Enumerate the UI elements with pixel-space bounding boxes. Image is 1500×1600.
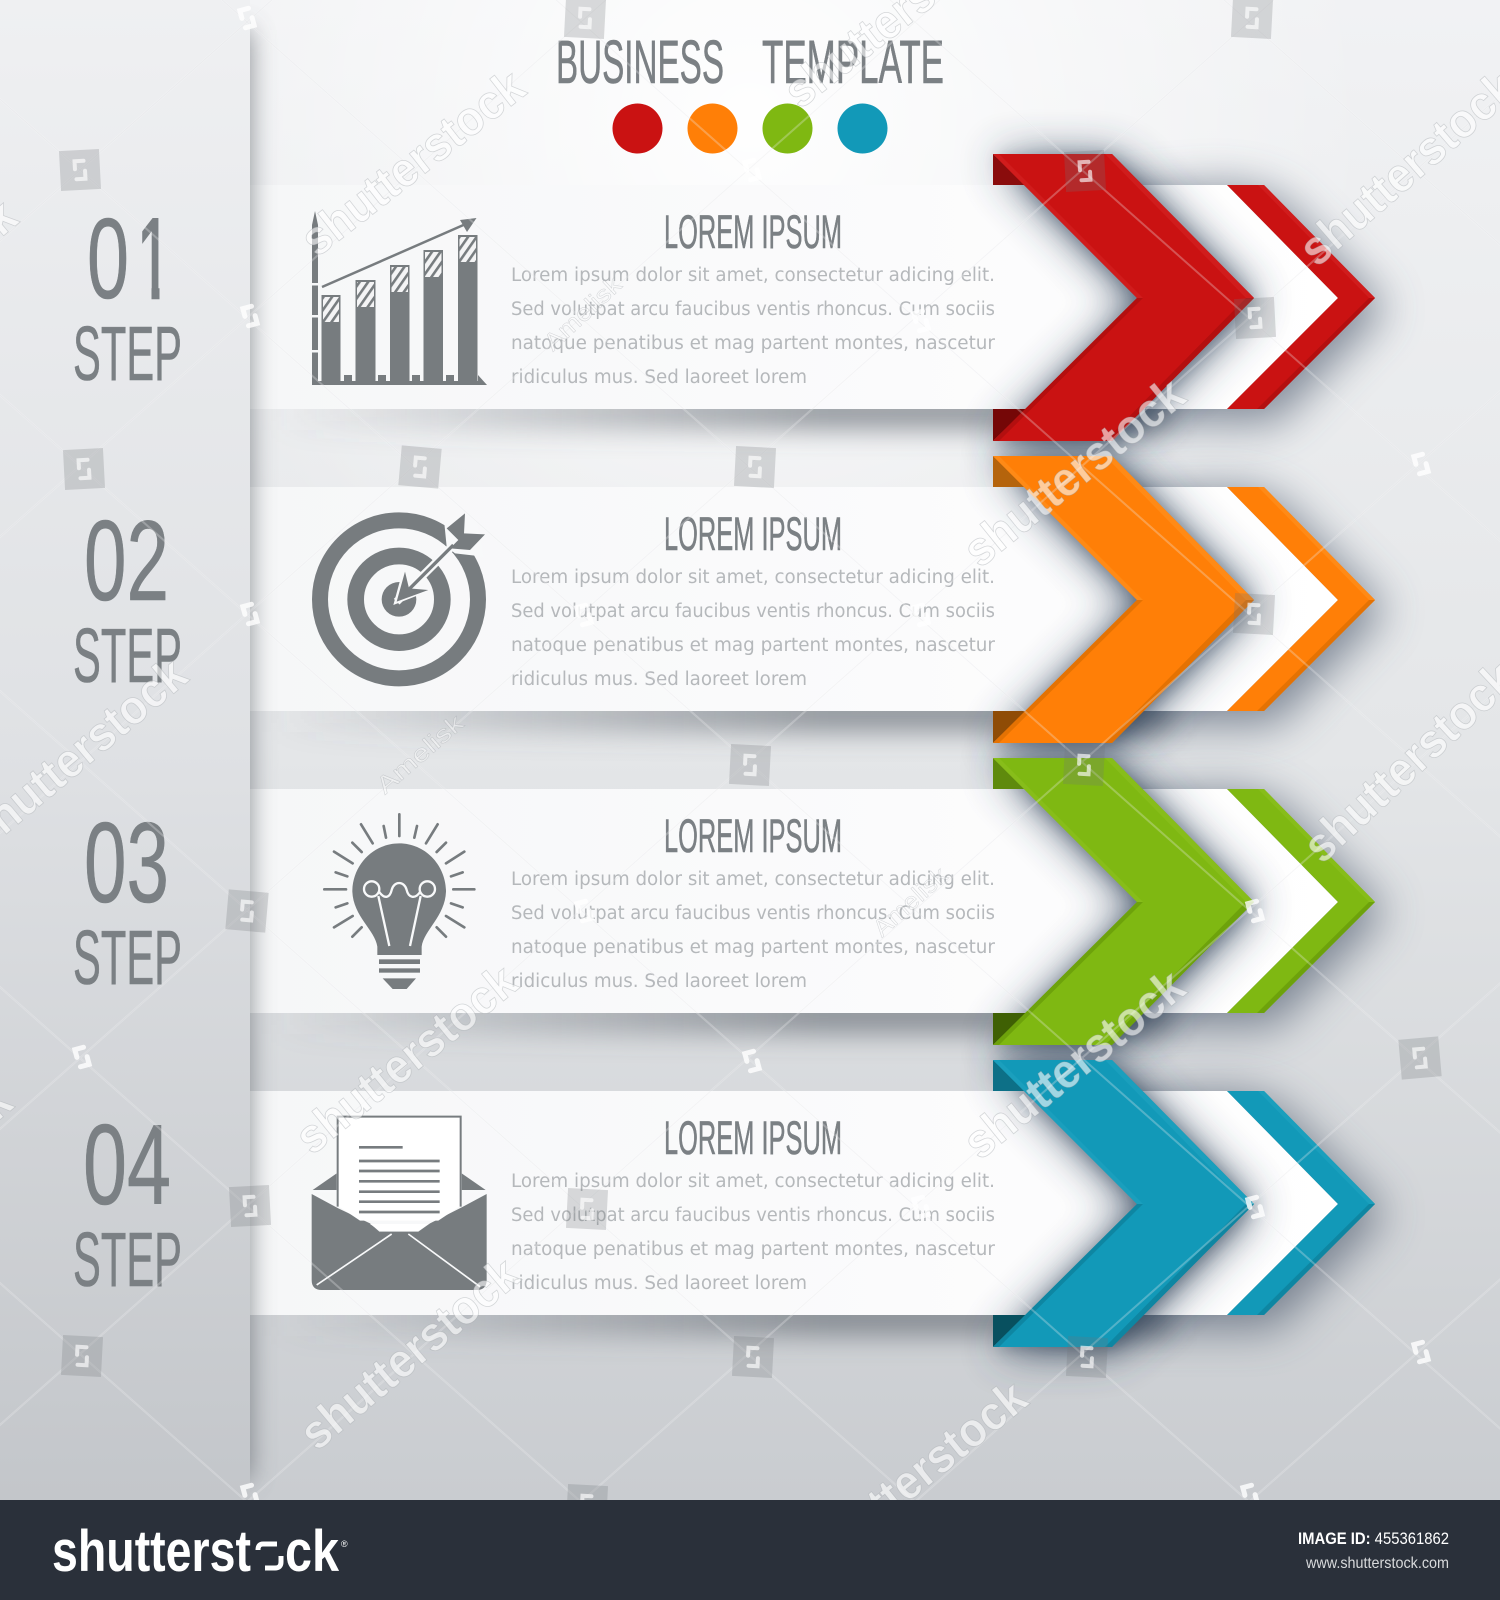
band shadow: [270, 996, 1170, 1034]
watermark: author text: Amelisk: [371, 709, 470, 800]
arrow shadow: [1100, 1091, 1386, 1329]
text block 3: LOREM IPSUM: [664, 809, 842, 862]
text block 1: natoque penatibus et mag partent montes, nascetur: [511, 333, 995, 354]
arrow shadow: [1100, 185, 1386, 423]
step 01 label: 0: [87, 196, 129, 323]
step 02 label: [73, 498, 182, 699]
title: BUSINESS: [556, 28, 724, 96]
text block 3: Lorem ipsum dolor sit amet, consectetur adicing elit.: [511, 869, 995, 890]
watermark: shutterstock text: shutterstock: [954, 368, 1195, 578]
watermark: shutterstock text: shutterstock: [290, 1247, 530, 1460]
watermark: author text: Amelisk: [868, 861, 954, 942]
sidebar shadow: [250, 20, 268, 1490]
small chevron: [1227, 1091, 1375, 1315]
step 01 label: [73, 196, 182, 397]
icon: target: [320, 513, 485, 678]
fold: top: [993, 154, 1026, 185]
text block 4: natoque penatibus et mag partent montes, nascetur: [511, 1239, 995, 1260]
footer logo: ck: [285, 1519, 340, 1584]
fold: bottom: [993, 1013, 1026, 1045]
row 3 band: green: [250, 761, 1386, 1049]
footer bar: [0, 1500, 1500, 1600]
website: www.shutterstock.com: [1305, 1555, 1449, 1572]
chevron shadow: [995, 761, 1256, 1049]
small chevron: [1227, 789, 1375, 1013]
step 01 label: 1: [137, 196, 171, 323]
watermark: author text: [371, 270, 954, 942]
footer logo: ®: [341, 1539, 348, 1549]
white band: [250, 789, 1338, 1013]
big chevron 2: orange: [993, 456, 1254, 743]
text block 1: Lorem ipsum dolor sit amet, consectetur adicing elit.: [511, 265, 995, 286]
big chevron 3: green: [993, 758, 1254, 1045]
chevron shadow: [995, 1063, 1256, 1351]
step 04 label: [73, 1102, 182, 1303]
text block 4: Lorem ipsum dolor sit amet, consectetur adicing elit.: [511, 1171, 995, 1192]
text block 4: ridiculus mus. Sed laoreet lorem: [511, 1273, 807, 1294]
watermark: author text: Amelisk: [539, 270, 628, 356]
text block 1: [511, 205, 995, 388]
band shadow: [270, 392, 1170, 430]
text block 1: ridiculus mus. Sed laoreet lorem: [511, 367, 807, 388]
text block 1: Sed volutpat arcu faucibus ventis rhoncus. Cum sociis: [511, 299, 995, 320]
band shadow: [270, 1298, 1170, 1336]
row 2 band: orange: [250, 459, 1386, 747]
text block 2: Sed volutpat arcu faucibus ventis rhoncus. Cum sociis: [511, 601, 995, 622]
icon: envelope with letter: [312, 1116, 487, 1290]
arrow shadow: [1100, 789, 1386, 1027]
step 02 label: STEP: [73, 613, 182, 699]
step 03 label: [73, 800, 182, 1001]
text block 2: [511, 507, 995, 690]
fold: bottom: [993, 711, 1026, 743]
text block 4: LOREM IPSUM: [664, 1111, 842, 1164]
icon: light bulb: [324, 814, 474, 989]
watermark: shutterstock text: shutterstock: [954, 960, 1195, 1170]
text block 4: [511, 1111, 995, 1294]
big chevron 4: blue: [993, 1060, 1254, 1347]
sidebar panel: [0, 0, 250, 1500]
fold: top: [993, 1060, 1026, 1091]
text block 2: natoque penatibus et mag partent montes, nascetur: [511, 635, 995, 656]
white band: [250, 487, 1338, 711]
big chevron 1: red: [993, 154, 1254, 441]
row 4 band: blue: [250, 1063, 1386, 1351]
text block 1: LOREM IPSUM: [664, 205, 842, 258]
fold: bottom: [993, 409, 1026, 441]
text block 4: Sed volutpat arcu faucibus ventis rhoncus. Cum sociis: [511, 1205, 995, 1226]
footer logo: shutterst: [52, 1519, 251, 1584]
watermark: shutterstock text: shutterstock: [291, 60, 535, 267]
step 03 label: 03: [84, 800, 169, 927]
step 04 label: 04: [83, 1102, 171, 1229]
step 02 label: 02: [84, 498, 169, 625]
step 04 label: STEP: [73, 1217, 182, 1303]
band shadow: [270, 694, 1170, 732]
chevron shadow: [995, 157, 1256, 445]
text block 2: LOREM IPSUM: [664, 507, 842, 560]
text block 3: [511, 809, 995, 992]
fold: bottom: [993, 1315, 1026, 1347]
arrow shadow: [1100, 487, 1386, 725]
chevron shadow: [995, 459, 1256, 747]
text block 3: natoque penatibus et mag partent montes, nascetur: [511, 937, 995, 958]
text block 2: ridiculus mus. Sed laoreet lorem: [511, 669, 807, 690]
white band: [250, 185, 1338, 409]
title: TEMPLATE: [762, 28, 944, 96]
fold: top: [993, 758, 1026, 789]
text block 2: Lorem ipsum dolor sit amet, consectetur adicing elit.: [511, 567, 995, 588]
step 01 label: STEP: [73, 311, 182, 397]
image id: IMAGE ID: 455361862: [1298, 1529, 1449, 1548]
text block 3: Sed volutpat arcu faucibus ventis rhoncus. Cum sociis: [511, 903, 995, 924]
small chevron: [1227, 185, 1375, 409]
small chevron: [1227, 487, 1375, 711]
watermark: shutterstock text: shutterstock: [286, 955, 527, 1165]
colour dots: [612, 104, 888, 154]
white band: [250, 1091, 1338, 1315]
fold: top: [993, 456, 1026, 487]
step 03 label: STEP: [73, 915, 182, 1001]
text block 3: ridiculus mus. Sed laoreet lorem: [511, 971, 807, 992]
row 1 band: red: [250, 157, 1386, 445]
icon: bar chart: [311, 211, 487, 385]
watermark: shutterstock text: shutterstock: [796, 1371, 1037, 1581]
